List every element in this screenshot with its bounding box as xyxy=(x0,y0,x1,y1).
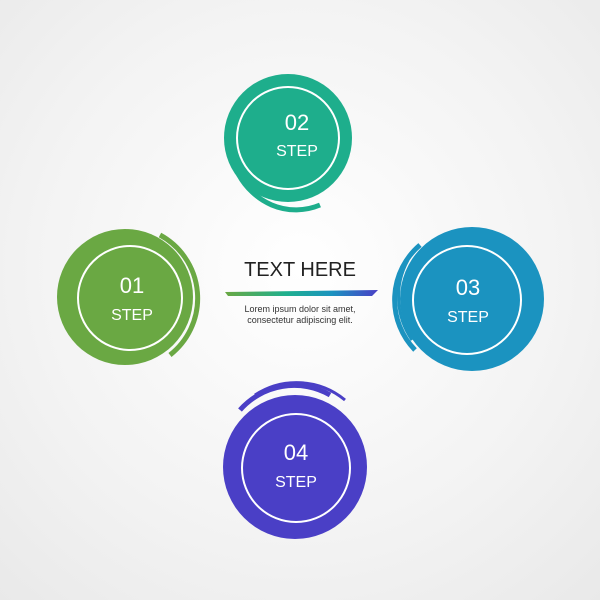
label 02: 02 xyxy=(285,110,309,135)
step 04 circle xyxy=(223,383,367,539)
step 04 circle: STEP xyxy=(275,474,317,491)
label 03: 03 xyxy=(456,275,480,300)
center text block: TEXT HERE xyxy=(244,259,356,281)
step 03 circle: STEP xyxy=(447,309,489,326)
label 01: 01 xyxy=(120,273,144,298)
step 02 circle xyxy=(224,74,352,210)
center text block: Lorem ipsum dolor sit amet, xyxy=(244,304,356,314)
center text block: consectetur adipiscing elit. xyxy=(247,315,353,325)
step 01 circle xyxy=(57,229,198,365)
step 02 circle: STEP xyxy=(276,143,318,160)
center text block xyxy=(225,259,378,325)
step 01 circle: STEP xyxy=(111,307,153,324)
step 03 circle xyxy=(395,227,544,371)
label 04: 04 xyxy=(284,440,308,465)
